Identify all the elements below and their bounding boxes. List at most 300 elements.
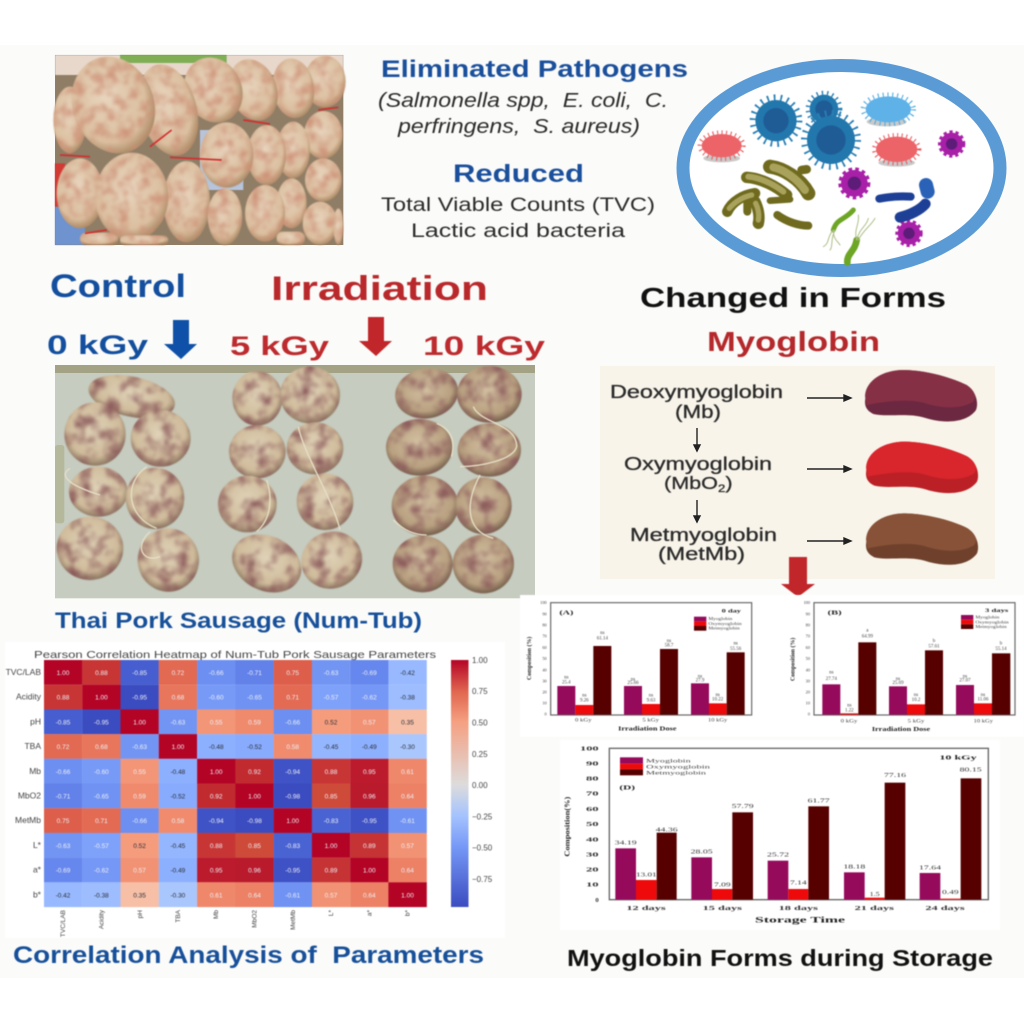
icon: dark blue bacilli — [879, 185, 928, 217]
x axis: 24 days — [925, 905, 965, 912]
heatmap cells: 0.55 — [133, 769, 146, 776]
bar value labels: 7.09 — [714, 883, 731, 889]
heatmap cells: 0.88 — [95, 670, 108, 677]
heatmap cells: 0.88 — [210, 843, 223, 850]
legend — [619, 754, 978, 791]
photo: hanging sausages — [53, 45, 346, 245]
bar value labels: 44.36 — [656, 828, 678, 834]
chart A: 0 day: 80 — [542, 623, 547, 628]
heatmap cells: 1.00 — [248, 794, 261, 800]
heatmap title: Pearson Correlation Heatmap of Num-Tub Pork Sausage Parameters — [34, 649, 436, 661]
chart B: 3 days — [790, 600, 1015, 733]
heatmap cells: -0.57 — [324, 695, 339, 702]
heatmap cells: 1.00 — [401, 892, 414, 899]
chart A: 0 day: 10 — [542, 701, 547, 706]
panel: myoglobin forms — [600, 366, 995, 579]
heatmap cells: 0.92 — [248, 769, 261, 776]
heatmap cells: -0.66 — [209, 670, 224, 677]
chart A: 0 day: 25.4 — [562, 680, 571, 685]
heatmap column labels: TVC/LAB — [60, 910, 67, 937]
icon: blue viruses — [754, 94, 856, 165]
chart A: 0 day: 0 kGy — [575, 719, 592, 724]
heatmap cells: -0.83 — [324, 818, 339, 825]
chart B: 3 days: 11.06 — [977, 698, 989, 703]
heatmap cells: 0.58 — [286, 744, 299, 751]
heatmap cells: 0.35 — [133, 892, 146, 899]
heatmap cells: 0.64 — [363, 892, 376, 899]
heatmap row labels — [6, 667, 42, 899]
pathogen list — [378, 90, 668, 138]
chart B: 3 days: 40 — [806, 667, 810, 672]
arrows: conversion steps — [694, 395, 851, 544]
heatmap row labels: MetMb — [15, 815, 41, 825]
heatmap cells: -0.83 — [285, 843, 300, 850]
chart B: 3 days: Myoglobin — [975, 615, 1000, 620]
chart B: 3 days: 70 — [806, 634, 810, 639]
label: deoxymyoglobin — [610, 382, 783, 422]
chart B: 3 days: 0 kGy — [841, 719, 858, 724]
chart B: 3 days: Metmyoglobin — [975, 624, 1008, 629]
heatmap column labels: pH — [137, 910, 144, 918]
chart A: 0 day: 9.63 — [647, 698, 656, 703]
heatmap cells: -0.63 — [324, 670, 339, 677]
bar value labels: 25.72 — [767, 852, 789, 858]
sausages: 10 kGy — [386, 363, 522, 593]
chart B: 3 days: 100 — [803, 600, 810, 605]
heading: myoglobin: Myoglobin — [707, 326, 880, 357]
x axis: Storage Time — [755, 916, 846, 925]
bars: storage groups — [615, 778, 981, 900]
heatmap cells: 0.58 — [172, 818, 185, 825]
bar value labels: 1.5 — [870, 892, 880, 898]
chart B: 3 days: a — [866, 629, 869, 634]
chart D: storage time 10 kGy — [560, 740, 1000, 930]
heatmap row labels: b* — [33, 889, 42, 899]
y axis: 60 — [586, 806, 600, 813]
chart B: 3 days: b — [933, 639, 936, 644]
heatmap colour bar: −0.50 — [472, 844, 493, 852]
heatmap cells: 0.57 — [401, 843, 414, 850]
chart A: 0 day: 30 — [542, 678, 547, 683]
chart A: 0 day: ns — [600, 631, 605, 636]
heatmap cells: 0.64 — [248, 892, 261, 899]
chart B: 3 days: ns — [914, 693, 918, 698]
chart A: 0 day: Metmyoglobin — [708, 626, 741, 631]
label: metmyoglobin: (MetMb) — [658, 544, 745, 564]
chart A: 0 day: ns — [649, 694, 653, 699]
x axis: 18 days — [779, 905, 819, 912]
heatmap row labels: MbO2 — [18, 790, 41, 800]
heatmap cells: 0.64 — [401, 794, 414, 800]
chart A: 0 day: ns — [564, 675, 569, 680]
chart A: 0 day: Irradiation Dose — [618, 727, 677, 733]
chart B: 3 days: 20 — [806, 690, 810, 695]
chart B: 3 days: ns — [847, 704, 852, 709]
caption: correlation analysis: Correlation Analysis of Parameters — [13, 942, 484, 969]
chart A: 0 day: (A) — [559, 610, 573, 617]
chart B: 3 days: 64.99 — [862, 634, 873, 639]
y axis: 80 — [586, 776, 600, 783]
sausages: 0 kGy — [57, 368, 199, 592]
legend: (D) — [619, 784, 635, 791]
heatmap cells: -0.63 — [132, 744, 147, 751]
heatmap cells: -0.30 — [170, 892, 186, 899]
heatmap colour bar: 0.50 — [472, 718, 488, 728]
chart B: 3 days: ns — [896, 677, 900, 682]
heatmap panel — [5, 642, 505, 938]
chart A: 0 day: 20 — [542, 690, 547, 695]
label: deoxymyoglobin: Deoxymyoglobin — [610, 382, 783, 402]
chart A: 0 day: ns — [733, 641, 738, 646]
heatmap row labels: pH — [30, 716, 41, 726]
y axis: 0 — [595, 897, 599, 904]
chart B: 3 days: 55.14 — [995, 647, 1007, 652]
heatmap colour bar: −0.75 — [472, 875, 493, 884]
chart A: 0 day: ns — [582, 694, 587, 699]
heatmap cells: 0.57 — [363, 719, 376, 726]
heatmap cells: -0.65 — [247, 695, 262, 702]
chart B: 3 days: 0 — [808, 712, 810, 717]
y axis: 70 — [586, 791, 600, 798]
heatmap cells: -0.42 — [400, 670, 415, 677]
chart B: 3 days: ns — [963, 674, 967, 679]
chart A: 0 day: 0 — [544, 712, 547, 717]
chart A: 0 day: Composition (%) — [526, 637, 533, 680]
heatmap cells: 0.88 — [325, 769, 338, 776]
heatmap cells: -0.52 — [170, 794, 186, 800]
x axis: 15 days — [703, 905, 743, 912]
caption: thai pork sausage: Thai Pork Sausage (Num-Tub) — [55, 608, 422, 633]
heatmap cells: 1.00 — [286, 818, 299, 825]
heading: changed in forms: Changed in Forms — [640, 282, 946, 313]
bar value labels: 61.77 — [808, 798, 830, 804]
heatmap cells: 0.71 — [286, 695, 299, 702]
heatmap cells: -0.85 — [132, 670, 147, 677]
arrow: irradiation down — [359, 317, 392, 356]
heatmap cells: -0.69 — [362, 670, 377, 677]
heatmap cells: 0.61 — [401, 769, 414, 776]
heatmap cells — [44, 660, 427, 907]
chart A: 0 day: 90 — [542, 611, 547, 616]
heatmap column labels: Mb — [213, 910, 220, 919]
icons: meat colour swatches — [865, 370, 978, 565]
icon: green spiral bacteria — [823, 210, 875, 263]
bar value labels: 13.01 — [636, 872, 657, 878]
heatmap column labels: Acidity — [98, 909, 106, 929]
label: 0 kGy: 0 kGy — [47, 330, 148, 360]
heatmap cells: -0.98 — [247, 818, 262, 825]
chart A: 0 day: ns — [698, 674, 702, 679]
chart B: 3 days: 80 — [806, 623, 810, 628]
illustration: petri dish with microbes — [683, 66, 1000, 270]
heatmap cells: -0.98 — [285, 794, 300, 800]
heading: control: Control — [50, 268, 186, 304]
heatmap cells: -0.38 — [400, 695, 415, 702]
chart B: 3 days: ns — [829, 670, 834, 675]
chart A: 0 day: 5 kGy — [642, 719, 660, 724]
swatch: oxymyoglobin red — [866, 442, 978, 493]
heatmap cells: -0.61 — [400, 818, 415, 825]
heatmap cells: -0.60 — [94, 769, 109, 776]
chart A: 0 day: 40 — [542, 667, 547, 672]
chart A: 0 day: Myoglobin — [708, 616, 733, 621]
heatmap cells: -0.85 — [56, 719, 71, 726]
heatmap cells: -0.71 — [56, 794, 71, 800]
chart B: 3 days: 50 — [806, 656, 810, 661]
heatmap cells: 0.57 — [325, 892, 338, 899]
heatmap cells: 0.68 — [95, 744, 108, 751]
chart A: 0 day: 25.66 — [627, 681, 639, 686]
y axis: 30 — [586, 851, 600, 858]
heatmap cells: -0.62 — [362, 695, 377, 702]
chart B: 3 days: Oxymyoglobin — [975, 619, 1010, 624]
heatmap cells: 0.88 — [57, 695, 70, 702]
heatmap cells: -0.42 — [56, 892, 71, 899]
chart B: 3 days: 90 — [806, 611, 810, 616]
photo: sausages by dose on cutting board — [55, 363, 535, 603]
heatmap column labels: b* — [404, 910, 412, 916]
label: 5 kGy: 5 kGy — [230, 331, 329, 361]
heatmap cells: 0.57 — [133, 868, 146, 875]
arrow: control down — [164, 320, 197, 359]
heatmap cells: 0.52 — [133, 843, 146, 850]
heatmap cells: -0.49 — [170, 868, 186, 875]
heatmap cells: -0.38 — [94, 892, 109, 899]
chart A: 0 day: 50 — [542, 656, 547, 661]
heatmap cells: 1.00 — [57, 670, 70, 677]
heatmap cells: 0.72 — [57, 744, 70, 751]
heatmap cells: 1.00 — [95, 695, 108, 702]
heatmap cells: -0.95 — [132, 695, 147, 702]
chart B: 3 days: Composition (%) — [790, 638, 797, 681]
heatmap cells: 0.89 — [325, 868, 338, 875]
heatmap cells: 0.55 — [210, 719, 223, 726]
bar value labels: 77.16 — [884, 773, 906, 779]
chart B: 3 days: 3 days — [985, 608, 1010, 614]
legend: Myoglobin — [646, 758, 691, 764]
y axis: 90 — [586, 760, 600, 767]
heatmap cells: -0.69 — [56, 868, 71, 875]
bar value labels: 17.64 — [919, 866, 941, 872]
chart A: 0 day: 10.22 — [712, 698, 724, 703]
heading: irradiation: Irradiation — [271, 270, 488, 308]
chart A: 0 day: 55.56 — [730, 647, 742, 652]
x axis — [626, 905, 965, 925]
chart A: 0 day: 60 — [542, 645, 547, 650]
heatmap cells: 0.96 — [363, 794, 376, 800]
chart A: 0 day: 10 kGy — [708, 719, 728, 724]
chart A: 0 day: ns — [715, 693, 720, 698]
chart B: 3 days: 10 kGy — [974, 719, 994, 724]
heatmap cells: -0.45 — [170, 843, 186, 850]
heatmap cells: 0.35 — [401, 719, 414, 726]
chart A: 0 day: 58.7 — [665, 644, 674, 649]
heatmap row labels: Mb — [29, 766, 41, 776]
heatmap cells: -0.66 — [285, 719, 300, 726]
bar value labels: 0.49 — [942, 890, 959, 896]
heatmap cells: -0.48 — [209, 744, 224, 751]
heatmap cells: 1.00 — [172, 744, 185, 751]
label: deoxymyoglobin: (Mb) — [675, 402, 721, 422]
heatmap cells: 0.95 — [363, 769, 376, 776]
bar value labels: 18.18 — [843, 864, 865, 870]
heatmap cells: -0.62 — [94, 868, 109, 875]
heatmap cells: 0.95 — [210, 868, 223, 875]
legend: Oxymyoglobin — [646, 764, 710, 770]
heatmap cells: 0.75 — [57, 818, 70, 825]
heatmap cells: 0.68 — [172, 695, 185, 702]
label: oxymyoglobin — [624, 454, 772, 495]
chart B: 3 days: 10.2 — [912, 698, 921, 703]
x axis: 12 days — [626, 905, 666, 912]
y axis: 50 — [586, 821, 600, 828]
heatmap row labels: a* — [33, 865, 42, 875]
heatmap cells: -0.52 — [247, 744, 262, 751]
heatmap column labels: TBA — [175, 909, 182, 923]
heatmap colour bar: 1.00 — [472, 656, 488, 665]
heatmap cells: 1.00 — [363, 868, 376, 875]
heatmap cells: -0.94 — [285, 769, 300, 776]
swatch: deoxymyoglobin purple — [865, 370, 977, 421]
heatmap cells: -0.66 — [132, 818, 147, 825]
chart B: 3 days: 27.07 — [959, 679, 971, 684]
chart A: 0 day: 100 — [540, 600, 547, 605]
chart A: 0 day — [526, 600, 752, 733]
heatmap cells: -0.66 — [56, 769, 71, 776]
heatmap colour bar: 0.25 — [472, 750, 488, 759]
chart B: 3 days: (B) — [828, 610, 842, 617]
chart B: 3 days: 27.74 — [826, 677, 837, 682]
chart A: 0 day: 9.26 — [580, 699, 589, 704]
heatmap row labels: Acidity — [16, 692, 42, 702]
legend: 10 kGy — [939, 754, 978, 761]
heatmap cells: -0.45 — [324, 744, 339, 751]
heatmap cells: -0.63 — [170, 719, 186, 726]
reduced list: Total Viable Counts (TVC) — [381, 195, 655, 216]
heatmap cells: 0.96 — [248, 868, 261, 875]
arrow: myoglobin to charts — [781, 557, 815, 597]
swatch: metmyoglobin brown — [866, 513, 978, 565]
bar value labels: 57.79 — [732, 804, 754, 810]
chart A: 0 day: 70 — [542, 634, 547, 639]
heatmap cells: 0.52 — [325, 719, 338, 726]
chart B: 3 days: 1.22 — [845, 709, 854, 714]
heatmap column labels: L* — [328, 910, 335, 916]
y axis: 20 — [586, 867, 600, 874]
label: metmyoglobin: Metmyoglobin — [630, 525, 777, 545]
chart A: 0 day: 0 day — [722, 609, 741, 615]
chart B: 3 days: Irradiation Dose — [872, 727, 931, 733]
heatmap cells: -0.49 — [362, 744, 377, 751]
heatmap cells: -0.95 — [94, 719, 109, 726]
heatmap cells: -0.30 — [400, 744, 415, 751]
heatmap cells: 1.00 — [133, 719, 146, 726]
heatmap cells: -0.71 — [247, 670, 262, 677]
reduced list — [381, 195, 655, 242]
heatmap cells: 0.64 — [401, 868, 414, 875]
heatmap cells: 0.59 — [248, 719, 261, 726]
label: oxymyoglobin: (MbO — [664, 474, 718, 494]
heatmap cells: 0.89 — [363, 843, 376, 850]
heading: eliminated pathogens: Eliminated Pathogens — [381, 56, 688, 83]
bar value labels: 28.05 — [691, 850, 713, 856]
chart B: 3 days: 5 kGy — [908, 719, 925, 724]
heatmap cells: 0.72 — [172, 670, 185, 677]
label: 10 kGy: 10 kGy — [423, 331, 545, 361]
heatmap cells: -0.57 — [94, 843, 109, 850]
chart A: 0 day: Oxymyoglobin — [708, 621, 743, 626]
chart B: 3 days: ns — [981, 693, 985, 698]
heatmap cells: 0.75 — [286, 670, 299, 677]
y axis: 100 — [580, 745, 600, 752]
icon: red microbes — [701, 134, 918, 167]
heatmap row labels: TBA — [24, 741, 41, 751]
label: oxymyoglobin: ) — [725, 474, 733, 494]
icon: olive rod bacteria — [727, 167, 808, 226]
heatmap row labels: L* — [33, 840, 42, 850]
heatmap cells: -0.48 — [170, 769, 186, 776]
chart A: 0 day: 27.9 — [696, 678, 705, 683]
x axis: 21 days — [855, 905, 895, 912]
heatmap cells: 0.71 — [95, 818, 108, 825]
heatmap colour bar — [451, 656, 493, 907]
chart A: 0 day: ns — [631, 677, 635, 682]
heatmap cells: -0.61 — [285, 892, 300, 899]
icon: purple viruses — [841, 133, 963, 245]
heatmap colour bar: −0.25 — [472, 812, 493, 822]
heatmap cells: 0.85 — [325, 794, 338, 800]
heatmap cells: -0.63 — [56, 843, 71, 850]
heatmap cells: -0.95 — [285, 868, 300, 875]
chart B: 3 days: 57.61 — [928, 644, 940, 649]
chart B: 3 days: b — [1000, 641, 1003, 646]
heatmap column labels: MetMb — [290, 910, 297, 930]
chart B: 3 days: 10 — [806, 701, 810, 706]
heatmap cells: -0.65 — [94, 794, 109, 800]
bar value labels: 80.15 — [960, 767, 982, 773]
heatmap cells: 0.85 — [248, 843, 261, 850]
chart A: 0 day: 61.14 — [597, 636, 608, 641]
heatmap cells: -0.60 — [209, 695, 224, 702]
legend: Metmyoglobin — [646, 770, 706, 776]
charts: 0 day and 3 days composition — [520, 595, 1024, 737]
heatmap cells: 1.00 — [325, 843, 338, 850]
y axis — [562, 745, 600, 904]
bar value labels: 7.14 — [790, 881, 807, 887]
heatmap cells: 0.92 — [210, 794, 223, 800]
label: metmyoglobin — [630, 525, 777, 564]
heatmap colour bar: 0.00 — [472, 781, 488, 790]
heatmap cells: 0.59 — [133, 794, 146, 800]
heading: reduced: Reduced — [453, 160, 584, 188]
pathogen list: (Salmonella spp, E. coli, C. — [378, 90, 668, 112]
chart A: 0 day: ns — [667, 639, 671, 644]
pathogen list: perfringens, S. aureus) — [397, 116, 640, 138]
sausages: 5 kGy — [218, 367, 370, 603]
label: oxymyoglobin: 2 — [718, 482, 726, 495]
heatmap cells: -0.95 — [362, 818, 377, 825]
caption: myoglobin forms during storage: Myoglobin Forms during Storage — [567, 945, 993, 971]
y axis: Composition(%) — [562, 796, 571, 857]
reduced list: Lactic acid bacteria — [411, 221, 626, 242]
heatmap row labels: TVC/LAB — [6, 667, 41, 677]
y axis: 10 — [586, 882, 600, 889]
chart B: 3 days: 30 — [806, 678, 810, 683]
heatmap cells: 1.00 — [210, 769, 223, 776]
heatmap column labels: MbO2 — [252, 910, 258, 928]
icon: light blue microbe — [864, 96, 912, 126]
bar value labels — [615, 767, 982, 898]
